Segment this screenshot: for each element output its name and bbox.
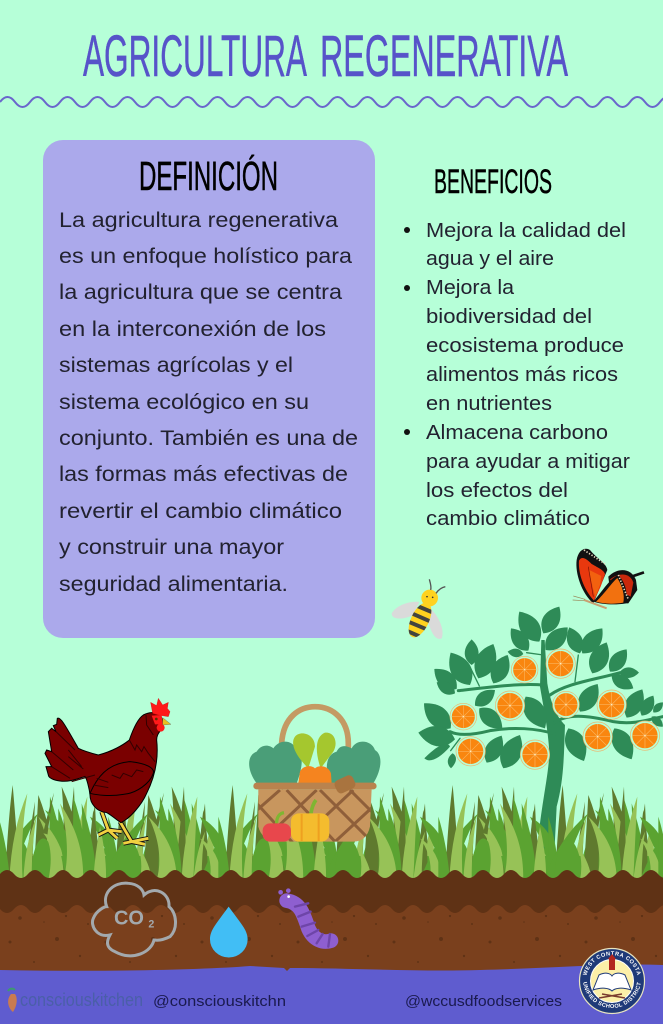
list: beneficios: los efectos del	[426, 479, 568, 502]
grass	[0, 785, 663, 925]
text block: definition: conjunto. También es una de	[59, 426, 358, 450]
text block: definition: la agricultura que se centra	[59, 280, 342, 304]
list: beneficios: en nutrientes	[426, 392, 552, 415]
heading: definición: DEFINICIÓN	[139, 153, 278, 199]
carrots	[298, 766, 332, 783]
text block: definition: sistema ecológico en su	[59, 390, 309, 414]
list: beneficios: biodiversidad del	[426, 305, 592, 328]
icon: orange tree	[417, 602, 663, 873]
panel: definición	[43, 140, 375, 638]
list: beneficios: Mejora la calidad del	[426, 219, 626, 242]
text block: definition: sistemas agrícolas y el	[59, 353, 293, 377]
text block: definition: y construir una mayor	[59, 535, 284, 559]
basket handle	[282, 707, 348, 783]
pepper	[277, 813, 284, 823]
list: beneficios: ecosistema produce	[426, 334, 624, 357]
list: beneficios: para ayudar a mitigar	[426, 450, 630, 473]
leafy greens	[249, 742, 380, 783]
icon: basket	[249, 707, 380, 843]
text block: definition: es un enfoque holístico para	[59, 244, 352, 268]
list: beneficios: agua y el aire	[426, 247, 554, 270]
icon: co2 cloud: CO	[114, 907, 144, 929]
icon: butterfly	[573, 549, 644, 608]
icon: co2 cloud: 2	[148, 919, 154, 931]
list: beneficios: cambio climático	[426, 507, 590, 530]
icon: school district seal: WEST CONTRA COSTA	[582, 951, 641, 976]
soil	[0, 870, 663, 980]
text block: definition: las formas más efectivas de	[59, 462, 348, 486]
pumpkin	[311, 800, 316, 815]
icon: hen	[45, 698, 171, 844]
icon: co2 cloud	[92, 883, 176, 956]
list: beneficios: alimentos más ricos	[426, 363, 618, 386]
text block: definition: La agricultura regenerativa	[59, 208, 338, 232]
text block: definition: revertir el cambio climático	[59, 499, 342, 523]
text block: definition	[59, 208, 358, 596]
text block: definition: en la interconexión de los	[59, 317, 326, 341]
list: beneficios	[404, 219, 630, 530]
basket body	[258, 789, 372, 842]
logo: conscious kitchen: consciouskitchen	[20, 990, 143, 1010]
icon: school district seal	[578, 948, 646, 1014]
icon: water drop	[210, 907, 248, 957]
carrot leaves	[293, 733, 336, 768]
heading: beneficios: BENEFICIOS	[434, 163, 552, 201]
list: beneficios: Almacena carbono	[426, 421, 608, 444]
text block: definition: seguridad alimentaria.	[59, 572, 288, 596]
footer bar	[0, 965, 663, 1024]
icon: school district seal: UNIFIED SCHOOL DISTRICT	[583, 982, 641, 1008]
icon: worm	[278, 888, 331, 947]
icon: bee	[392, 579, 445, 641]
handle: conscious kitchen: @consciouskitchn	[153, 993, 286, 1010]
basket rim	[253, 783, 377, 789]
list: beneficios: Mejora la	[426, 276, 515, 299]
handle: food services: @wccusdfoodservices	[405, 993, 562, 1010]
title: AGRICULTURA	[83, 24, 307, 89]
